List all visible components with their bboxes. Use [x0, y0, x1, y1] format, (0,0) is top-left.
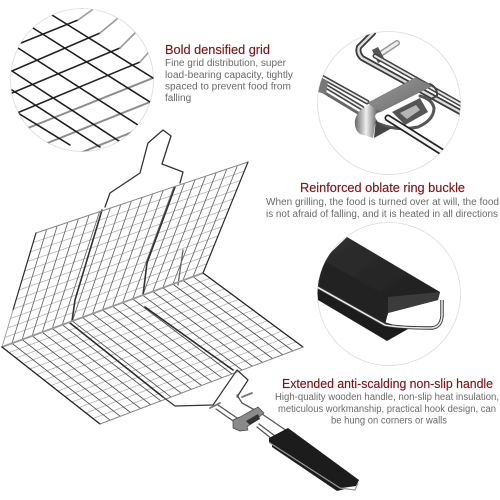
text block: handle description: [275, 392, 499, 426]
small ring buckle and rods: [210, 393, 287, 439]
lower wire handle: [163, 370, 248, 406]
black handle: [269, 428, 359, 491]
text block: buckle description: When grilling, the food is turned over at will, the food: [266, 197, 499, 208]
heading: Extended anti-scalding non-slip handle: Extended anti-scalding non-slip handle: [282, 377, 493, 391]
panel: extended anti-scalding handle callout: [275, 222, 499, 426]
panel: bold densified grid callout: [10, 8, 293, 155]
text block: grid description: Fine grid distribution, super: [165, 58, 287, 69]
text block: grid description: spaced to prevent food from: [165, 82, 291, 92]
text block: grid description: [165, 58, 293, 104]
text block: grid description: load-bearing capacity, tightly: [165, 70, 293, 81]
upper grid panel: [2, 162, 248, 347]
lower grid panel: [2, 273, 303, 424]
illustration: open grill basket: [2, 130, 359, 491]
text block: grid description: falling: [165, 93, 191, 104]
panel: reinforced oblate ring buckle callout: [266, 32, 499, 220]
detail circle: close-up of the grid: [10, 8, 154, 155]
text block: handle description: be hung on corners or walls: [331, 416, 447, 426]
detail circle: close-up of the handle end: [317, 222, 460, 366]
heading: Reinforced oblate ring buckle: Reinforced oblate ring buckle: [300, 181, 465, 195]
text block: buckle description: [266, 197, 499, 220]
heading: Bold densified grid: Bold densified grid: [165, 43, 270, 57]
text block: buckle description: is not afraid of falling, and it is heated in all directions: [266, 209, 498, 220]
upper wire handle: [105, 130, 183, 207]
detail circle: close-up of the ring buckle: [318, 32, 462, 174]
